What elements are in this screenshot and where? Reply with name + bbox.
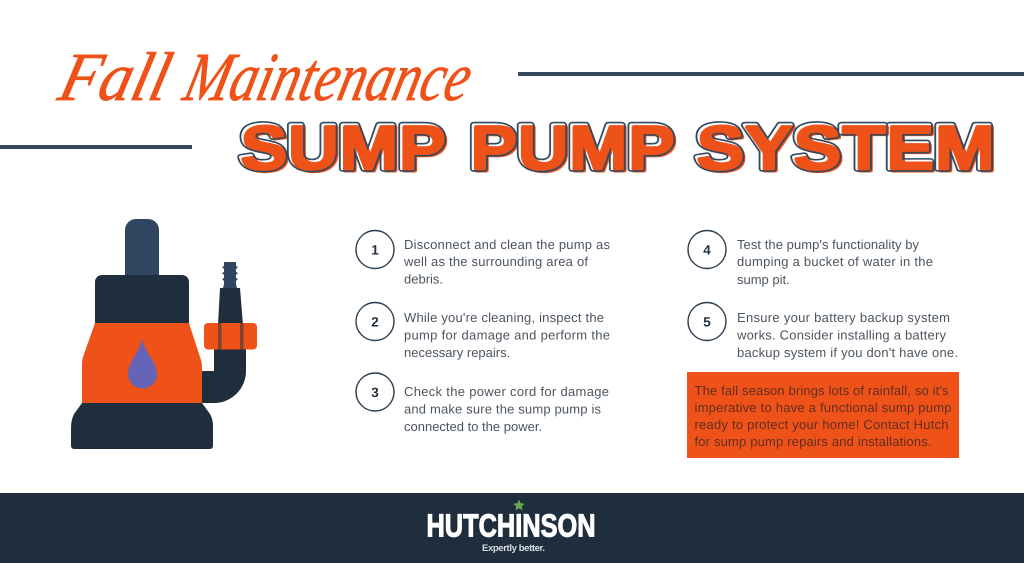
pump handle (125, 219, 159, 275)
heading: Sump Pump System: SUMP (239, 112, 445, 182)
nozzle taper (218, 288, 243, 325)
icon: green star (513, 500, 525, 510)
step 3 (356, 373, 609, 434)
threaded nozzle (222, 262, 238, 288)
title: Fall Maintenance: Fall (51, 39, 179, 115)
step 5: 5 (703, 314, 711, 330)
step 3: connected to the power. (404, 419, 542, 434)
step 1: debris. (404, 272, 443, 286)
step 4: sump pit. (737, 272, 790, 287)
collar strips (218, 323, 244, 350)
step 4: dumping a bucket of water in the (737, 254, 933, 269)
footer band (0, 493, 1024, 563)
heading: Sump Pump System (237, 121, 994, 174)
step 3: 3 (371, 385, 379, 400)
callout: The fall season brings lots of rainfall, so it's (694, 383, 949, 398)
callout (687, 372, 959, 458)
step 5: Ensure your battery backup system (737, 310, 950, 325)
title: Fall Maintenance (51, 39, 480, 115)
step 1 (356, 230, 610, 286)
step 1: 1 (371, 242, 379, 258)
heading: Sump Pump System: SYSTEM (695, 112, 994, 182)
callout: ready to protect your home! Contact Hutch (694, 417, 948, 432)
step 4 (688, 230, 933, 287)
heading: Sump Pump System: PUMP (469, 112, 674, 182)
heading: Sump Pump System: SYSTEM (698, 114, 996, 184)
step 1: Disconnect and clean the pump as (404, 237, 610, 252)
pump top housing (95, 275, 189, 323)
pump base (71, 403, 213, 449)
step 2: While you're cleaning, inspect the (404, 310, 604, 325)
heading: Sump Pump System: SUMP (242, 114, 448, 184)
step 4: 4 (703, 242, 711, 258)
icon: sump pump (71, 219, 257, 449)
logo: Hutchinson: HUTCHINSON (426, 508, 596, 544)
step 2 (356, 302, 610, 360)
heading: Sump Pump System: PUMP (472, 114, 676, 184)
step 3: and make sure the sump pump is (404, 402, 602, 416)
step 2: pump for damage and perform the (404, 328, 610, 342)
step 5 (688, 302, 958, 360)
logo: Hutchinson: Expertly better. (482, 543, 545, 554)
pump orange body (82, 323, 202, 403)
step 5: works. Consider installing a battery (736, 328, 946, 342)
step 2: 2 (371, 314, 379, 330)
title: Fall Maintenance: Maintenance (176, 39, 480, 115)
step 1: well as the surrounding area of (403, 254, 588, 269)
step 4: Test the pump's functionality by (737, 237, 920, 252)
step 3: Check the power cord for damage (404, 384, 609, 399)
orange collar (204, 323, 257, 350)
water drop (128, 338, 157, 388)
step 2: necessary repairs. (404, 345, 510, 360)
discharge pipe (202, 345, 246, 403)
callout: for sump pump repairs and installations. (694, 434, 932, 449)
callout: imperative to have a functional sump pump (694, 400, 952, 415)
step 5: backup system if you don't have one. (737, 345, 958, 360)
logo: Hutchinson (426, 500, 596, 554)
